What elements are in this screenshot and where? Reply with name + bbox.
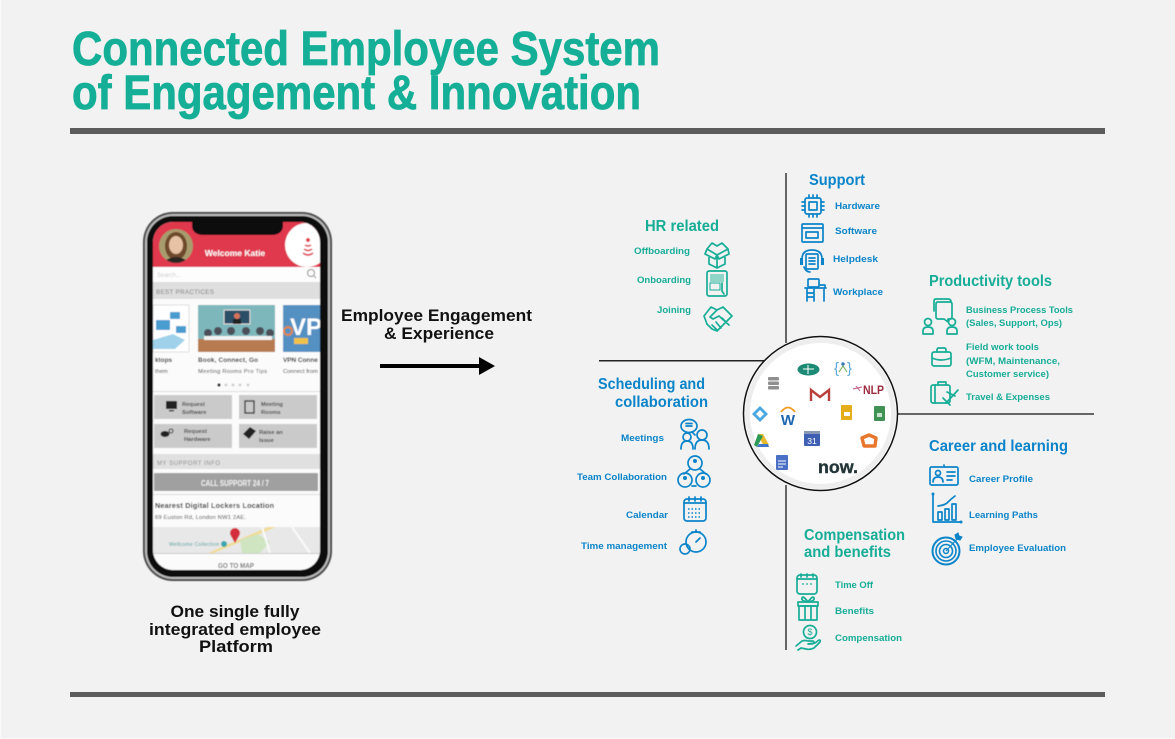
Calendar item: Calendar (626, 510, 668, 521)
engagement label: Employee Engagement (341, 306, 532, 325)
action buttons: Hardware (184, 437, 211, 443)
practice cards: VP (290, 314, 322, 341)
panel: career and learning (929, 438, 1068, 564)
my support info band: MY SUPPORT INFO (157, 461, 220, 467)
icon: calendar 31: 31 (807, 436, 817, 446)
icon: NLP (853, 383, 884, 397)
map (153, 527, 320, 553)
carousel dots (153, 383, 320, 392)
phone caption: integrated employee (149, 621, 321, 639)
Joining item: Joining (657, 305, 691, 316)
lockers location (153, 494, 320, 521)
icon: docs (776, 455, 788, 470)
action buttons: Software (182, 410, 207, 416)
Field work tools item: Field work tools (966, 342, 1039, 353)
Offboarding item: Offboarding (634, 246, 690, 257)
icon: calendar 31 (804, 431, 820, 446)
phone mockup (143, 212, 332, 581)
Onboarding item: Onboarding (637, 275, 691, 286)
Travel & Expenses item (931, 382, 1050, 405)
icon: diamond (752, 406, 768, 422)
action buttons (154, 395, 317, 448)
title: Connected Employee System (72, 23, 660, 76)
panel: support (800, 172, 883, 301)
action buttons: Meeting (261, 402, 283, 408)
practice cards: Connect from (283, 369, 318, 375)
Compensation item: $ (807, 627, 813, 637)
Software item: Software (835, 226, 877, 237)
call support button (154, 473, 318, 491)
action buttons: Rooms (261, 410, 281, 416)
practice cards: them (155, 369, 168, 375)
icon: braces: { (834, 360, 839, 377)
phone caption: Platform (199, 638, 273, 656)
Calendar item (626, 497, 706, 521)
map: Wellcome Collection (169, 542, 219, 548)
Business Process Tools item: (Sales, Support, Ops) (966, 318, 1062, 329)
hub circle of apps (744, 336, 898, 490)
panel: compensation and benefits (796, 527, 905, 650)
icon: database (768, 377, 779, 390)
call support button: CALL SUPPORT 24 / 7 (201, 479, 269, 488)
Business Process Tools item (923, 299, 1073, 334)
app header: Welcome Katie (205, 248, 265, 258)
search bar (157, 268, 316, 278)
practice cards: VPN Conne (283, 357, 318, 364)
panel: career and learning: Career and learning (929, 438, 1068, 455)
title: of Engagement & Innovation (72, 67, 641, 120)
icon: NLP: NLP (863, 383, 884, 397)
Career Profile item: Career Profile (969, 474, 1033, 485)
panel: productivity tools (923, 273, 1073, 405)
panel: compensation and benefits: and benefits (804, 544, 891, 561)
icon: flower (862, 435, 876, 446)
engagement label (341, 306, 532, 343)
Workplace item: Workplace (833, 287, 883, 298)
Field work tools item: Customer service) (966, 369, 1049, 380)
panel: compensation and benefits: Compensation (804, 527, 905, 544)
practice cards: Book, Connect, Go (198, 357, 258, 364)
Travel & Expenses item: Travel & Expenses (966, 392, 1050, 403)
Benefits item: Benefits (835, 606, 874, 617)
search bar: Search... (157, 273, 181, 279)
phone caption (149, 603, 321, 656)
Time Off item: Time Off (835, 580, 874, 591)
Field work tools item: (WFM, Maintenance, (966, 356, 1060, 367)
panel: HR related: HR related (645, 218, 719, 235)
Meetings item (621, 420, 709, 449)
Team Collaboration item: Team Collaboration (577, 472, 667, 483)
icon: braces (834, 360, 852, 377)
practice cards: Meeting Rooms Pro Tips (198, 369, 267, 375)
panel: HR related (634, 218, 732, 331)
Field work tools item (932, 342, 1060, 380)
best practices band (153, 282, 320, 299)
panel: productivity tools: Productivity tools (929, 273, 1052, 290)
Employee Evaluation item: Employee Evaluation (969, 543, 1066, 554)
Meetings item: Meetings (621, 433, 664, 444)
Hardware item: Hardware (835, 201, 880, 212)
action buttons: Request (184, 429, 207, 435)
Business Process Tools item: Business Process Tools (966, 305, 1073, 316)
icon: drive (754, 434, 769, 447)
panel: support: Support (809, 172, 865, 189)
action buttons: Raise an (259, 430, 283, 436)
panel: scheduling and collaboration: Scheduling and (598, 376, 705, 393)
icon: sheets (874, 406, 885, 421)
Team Collaboration item (577, 456, 710, 487)
app header (153, 222, 329, 267)
icon: now logo: now. (818, 457, 858, 477)
practice cards (153, 305, 322, 375)
Helpdesk item: Helpdesk (833, 254, 879, 265)
phone caption: One single fully (170, 603, 300, 621)
lockers location: 69 Euston Rd, London NW1 2AE. (155, 515, 246, 521)
my support info band (153, 454, 320, 469)
icon: workday: W (781, 412, 796, 429)
Time management item: Time management (581, 541, 668, 552)
Time management item (581, 530, 706, 554)
go to map (153, 553, 320, 570)
action buttons: Request (182, 402, 205, 408)
panel: scheduling and collaboration: collaboration (615, 394, 708, 411)
icon: slides (841, 405, 852, 420)
engagement label: & Experience (384, 324, 494, 343)
panel: scheduling and collaboration (577, 376, 710, 554)
action buttons: Issue (259, 438, 275, 444)
best practices band: BEST PRACTICES (156, 289, 214, 296)
icon: brain (798, 364, 820, 376)
icon: braces: } (847, 360, 852, 377)
Compensation item: Compensation (835, 633, 902, 644)
go to map: GO TO MAP (218, 561, 254, 570)
Learning Paths item: Learning Paths (969, 510, 1038, 521)
Compensation item (796, 626, 902, 650)
icon: gmail (811, 390, 829, 401)
lockers location: Nearest Digital Lockers Location (155, 501, 274, 510)
practice cards: ktops (155, 357, 172, 364)
title (72, 23, 660, 120)
arrow (380, 357, 495, 375)
